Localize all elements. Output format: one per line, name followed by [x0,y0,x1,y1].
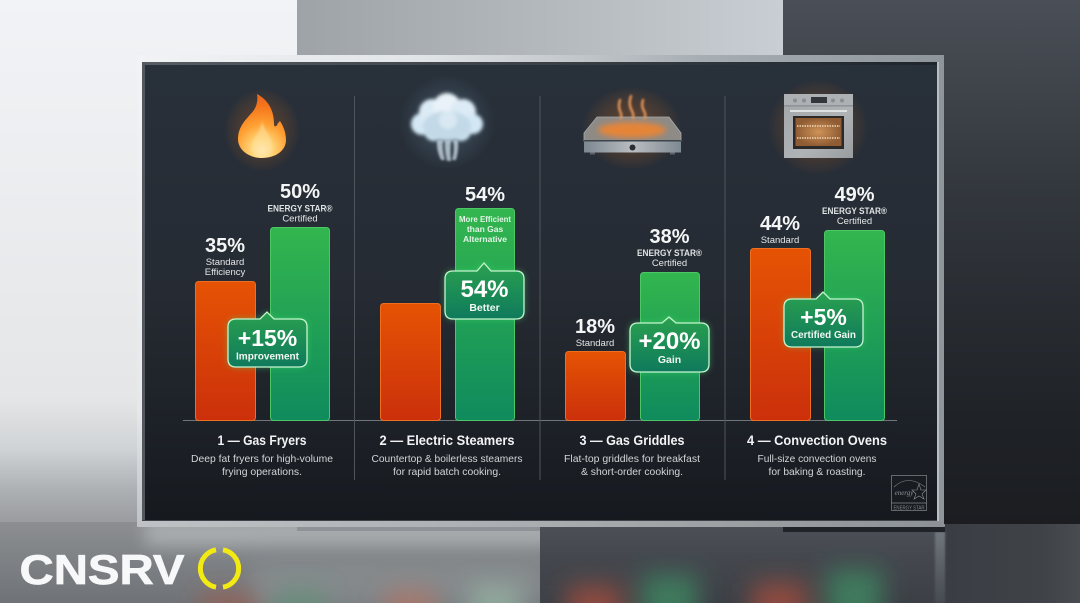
label: 49% energy star certified [822,184,887,227]
label: 38% energy star certified: ENERGY STAR® [637,248,702,258]
bar: certified 54% [456,208,514,420]
label: 44% standard: Standard [761,235,799,246]
floor reflections of bars [200,570,882,603]
bar: certified 38% [640,272,700,420]
callout: 54% better [445,263,524,319]
label: 50% energy star certified: 50% [280,181,320,203]
callout: +5% certified gain: +5% [800,304,847,330]
chart baseline [183,420,897,422]
label: 54% value: 54% [465,184,505,206]
logo: CNSRV: CNSRV [20,546,185,593]
label: 50% energy star certified [268,181,333,224]
label: 38% energy star certified [637,226,702,269]
label: 35% standard efficiency [205,235,245,278]
callout: +5% certified gain [784,292,863,347]
description: electric steamers: Countertop & boilerless steamers [372,453,522,465]
icon: energy star logo: ENERGY STAR [894,506,925,512]
callout: +20% gain: Gain [658,354,681,366]
label: more efficient than gas alternative [459,214,511,244]
bar: standard efficiency 35% [196,282,256,420]
icon: flame [224,88,300,172]
callout: +15% improvement: +15% [238,325,297,351]
description: gas fryers: Deep fat fryers for high-volume [191,453,333,465]
label: 35% standard efficiency: Standard [206,257,244,268]
label: 49% energy star certified: ENERGY STAR® [822,206,887,216]
description: gas griddles [564,432,700,478]
description: convection ovens: for baking & roasting. [768,466,866,478]
label: 50% energy star certified: ENERGY STAR® [268,204,333,214]
description: electric steamers: 2 — Electric Steamers [380,432,515,448]
label: 49% energy star certified: 49% [834,184,875,206]
bar: certified 49% [824,230,884,420]
label: more efficient than gas alternative: Alternative [463,234,507,244]
label: 38% energy star certified: 38% [649,226,690,248]
callout: +20% gain: +20% [638,328,701,355]
callout: +5% certified gain: Certified Gain [791,329,856,341]
bar: standard 18% [566,352,626,420]
icon: energy star logo: energy [895,489,914,497]
panel: convection ovens [747,79,887,478]
icon: steam cloud [399,74,495,170]
icon: energy star logo [892,476,926,512]
description: convection ovens: Full-size convection ovens [758,453,876,465]
panel: electric steamers [372,74,524,478]
dark display panel [145,65,937,520]
callout: +15% improvement [228,312,307,367]
label: 44% standard [760,213,800,246]
callout: 54% better: 54% [460,276,509,303]
icon: griddle [582,86,682,170]
label: 44% standard: 44% [760,213,800,235]
label: 35% standard efficiency: 35% [205,235,245,257]
bar: standard [380,304,440,420]
callout: +20% gain [630,317,709,372]
callout: 54% better: Better [469,302,500,314]
label: 18% standard: Standard [576,338,614,349]
description: convection ovens: 4 — Convection Ovens [747,432,887,448]
icon: yellow ring logo mark [200,550,239,587]
icon: oven [768,79,868,175]
bar: standard 44% [750,248,810,420]
description: convection ovens [747,432,887,478]
label: 18% standard [575,316,615,349]
label: 38% energy star certified: Certified [652,258,687,269]
label: more efficient than gas alternative: than Gas [467,224,503,234]
description: electric steamers [372,432,522,478]
bar: certified 50% [270,228,330,420]
label: 50% energy star certified: Certified [282,214,318,224]
column dividers [354,96,725,480]
label: more efficient than gas alternative: More Efficient [459,214,511,224]
description: gas griddles: & short-order cooking. [581,466,683,478]
description: gas griddles: Flat-top griddles for breakfast [564,453,700,465]
logo: CNSRV [20,546,239,593]
description: gas fryers: frying operations. [222,466,302,478]
label: 18% standard: 18% [575,316,615,338]
panel: gas griddles [564,86,709,478]
label: 49% energy star certified: Certified [837,216,872,227]
description: electric steamers: for rapid batch cooking. [393,466,501,478]
callout: +15% improvement: Improvement [236,350,299,362]
panel: gas fryers [191,88,333,478]
description: gas fryers [191,432,333,478]
monitor frame [137,55,944,527]
description: gas fryers: 1 — Gas Fryers [218,432,307,448]
description: gas griddles: 3 — Gas Griddles [580,432,685,448]
label: 35% standard efficiency: Efficiency [205,267,245,278]
